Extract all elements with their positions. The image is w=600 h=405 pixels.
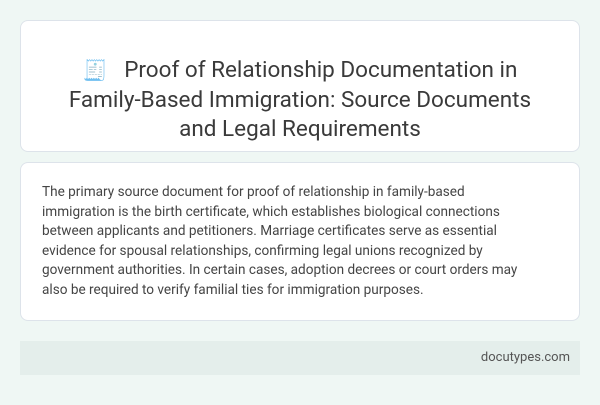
description text: government authorities. In certain cases, adoption decrees or court orders may: [42, 262, 517, 278]
description card: [20, 162, 580, 321]
description text: also be required to verify familial ties for immigration purposes.: [42, 282, 424, 298]
title: 🧾 Proof of Relationship Documentation in: [83, 57, 517, 83]
title: [69, 57, 531, 142]
footer: [20, 341, 580, 375]
title: and Legal Requirements: [179, 116, 421, 142]
description text: immigration is the birth certificate, which establishes biological connections: [42, 204, 500, 220]
footer: docutypes.com: [481, 350, 570, 365]
description text: evidence for spousal relationships, confirming legal unions recognized by: [42, 243, 483, 259]
title card: [20, 20, 580, 152]
description text: between applicants and petitioners. Marriage certificates serve as essential: [42, 223, 497, 239]
description text: [42, 184, 518, 298]
title: Family-Based Immigration: Source Documents: [69, 86, 531, 112]
description text: The primary source document for proof of relationship in family-based: [42, 184, 465, 200]
